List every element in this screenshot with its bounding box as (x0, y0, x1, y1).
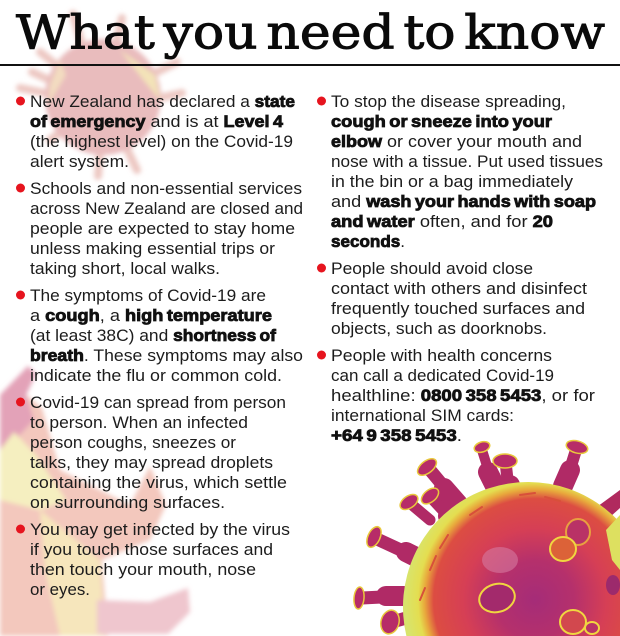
bullet 4: spread (16, 393, 287, 512)
heading rule (0, 64, 620, 66)
bullet 4: spread: person coughs, sneezes or (30, 433, 236, 452)
bullet 5: surfaces: You may get infected by the virus (30, 520, 290, 539)
bullet 1: state of emergency: New Zealand has declared a state (30, 92, 295, 111)
bullet 5: surfaces: if you touch those surfaces and (30, 540, 273, 559)
bullet 5: surfaces (16, 520, 290, 599)
bullet 6: hygiene (317, 92, 603, 251)
bullet 8: healthline: can call a dedicated Covid-19 (331, 366, 554, 385)
bullet 3: symptoms (16, 286, 303, 385)
bullet 1: state of emergency: (the highest level) on the Covid-19 (30, 132, 293, 151)
bullet 8: healthline: People with health concerns (331, 346, 552, 365)
bullet 6: hygiene: and wash your hands with soap (331, 192, 596, 211)
title: What you need to know (16, 6, 605, 60)
bullet 1: state of emergency (16, 92, 295, 171)
bullet 7: avoid contact: frequently touched surfaces and (331, 299, 585, 318)
bullet 2: closures: across New Zealand are closed and (30, 199, 303, 218)
bullet 6: hygiene: To stop the disease spreading, (331, 92, 566, 111)
bullet 3: symptoms: a cough, a high temperature (30, 306, 272, 325)
sphere (403, 482, 620, 636)
bullet 4: spread: to person. When an infected (30, 413, 248, 432)
spike: right edge (590, 490, 620, 526)
bullet 4: spread: Covid-19 can spread from person (30, 393, 286, 412)
bullet 8: healthline: international SIM cards: (331, 406, 514, 425)
bullet 1: state of emergency: of emergency and is at Level 4 (30, 112, 284, 131)
bullet 3: symptoms: breath. These symptoms may also (30, 346, 303, 365)
bullet 6: hygiene: nose with a tissue. Put used tissues (331, 152, 603, 171)
bullet 6: hygiene: cough or sneeze into your (331, 112, 552, 131)
bullet 8: healthline: +64 9 358 5453 . (331, 426, 462, 445)
virus illustration: bottom right (353, 438, 620, 636)
surface detail (476, 519, 599, 634)
bullet 6: hygiene: elbow or cover your mouth and (331, 132, 582, 151)
bullet 8: healthline (317, 346, 595, 445)
bullet 4: spread: containing the virus, which settle (30, 473, 287, 492)
bullet 5: surfaces: then touch your mouth, nose (30, 560, 256, 579)
bullet 2: closures (16, 179, 303, 278)
bullet 3: symptoms: (at least 38C) and shortness of (30, 326, 276, 345)
bullet 6: hygiene: in the bin or a bag immediately (331, 172, 574, 191)
faded virus: lower left (0, 366, 190, 636)
bullet 7: avoid contact (317, 259, 587, 338)
bullet 2: closures: Schools and non-essential services (30, 179, 302, 198)
bullet 2: closures: people are expected to stay home (30, 219, 295, 238)
bullet 2: closures: taking short, local walks. (30, 259, 220, 278)
bullet 5: surfaces: or eyes. (30, 580, 90, 599)
faded virus: top left (20, 14, 182, 176)
bullet 6: hygiene: and water often, and for 20 (331, 212, 553, 231)
left column (16, 92, 303, 599)
bullet 3: symptoms: The symptoms of Covid-19 are (30, 286, 266, 305)
right column (317, 92, 603, 445)
bullet 2: closures: unless making essential trips or (30, 239, 275, 258)
bullet 8: healthline: healthline: 0800 358 5453 , or for (331, 386, 595, 405)
bullet 7: avoid contact: objects, such as doorknobs. (331, 319, 547, 338)
bullet 7: avoid contact: People should avoid close (331, 259, 533, 278)
bullet 3: symptoms: indicate the flu or common cold. (30, 366, 282, 385)
bullet 6: hygiene: seconds. (331, 232, 405, 251)
bullet 1: state of emergency: alert system. (30, 152, 129, 171)
spike heads (353, 438, 589, 636)
spikes (362, 450, 576, 622)
bullet 4: spread: on surrounding surfaces. (30, 493, 225, 512)
bullet 4: spread: talks, they may spread droplets (30, 453, 273, 472)
bullet 7: avoid contact: contact with others and disinfect (331, 279, 587, 298)
